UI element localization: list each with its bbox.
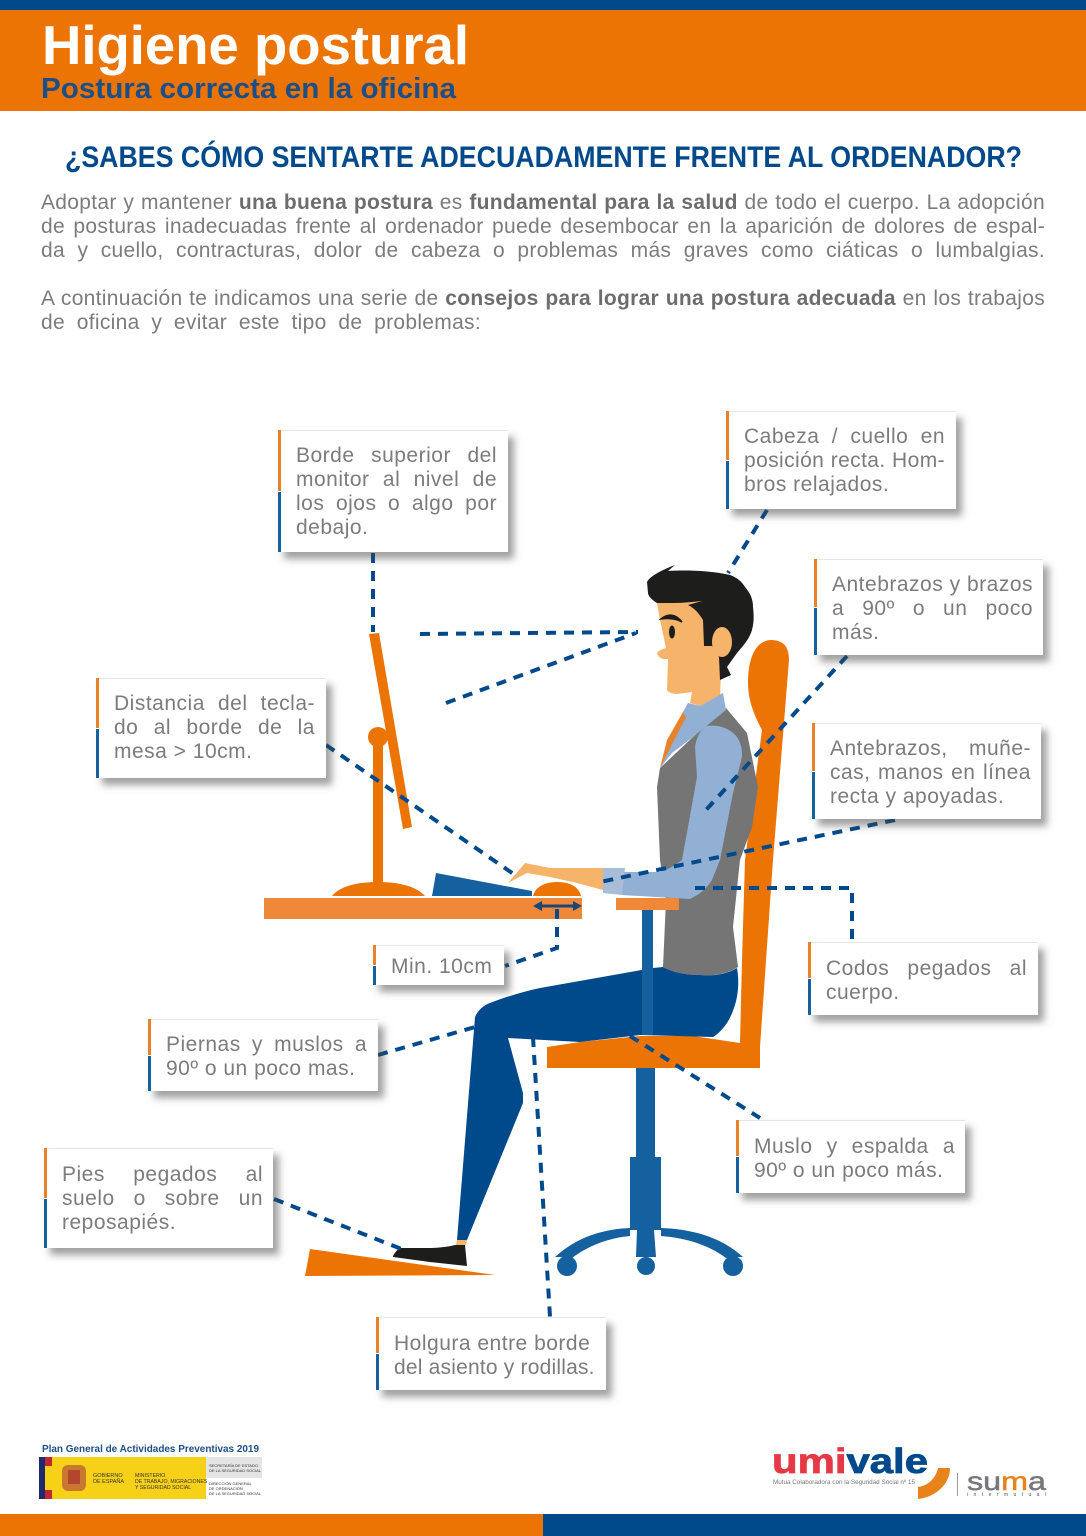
callout: legs and thighs — [148, 1019, 378, 1091]
callout: wrists and hands — [812, 723, 1041, 819]
intro paragraph: da y cuello, contracturas, dolor de cabeza o problemas más graves como ciáticas o lumbalgias. — [41, 239, 1045, 262]
callout: head and neck: Cabeza / cuello en — [744, 425, 945, 448]
illustration: foot rest — [305, 1249, 495, 1276]
callout: feet: suelo o sobre un — [62, 1187, 263, 1210]
illustration: seated man — [393, 565, 758, 1266]
footer band — [0, 1514, 1086, 1536]
callout: monitor: debajo. — [296, 516, 368, 539]
footer: government logo block: DE ORDENACIÓN — [209, 1486, 243, 1491]
callout: thigh and back: 90º o un poco más. — [754, 1159, 943, 1182]
callout: minimum distance — [373, 945, 504, 985]
intro paragraph: de posturas inadecuadas frente al ordenador puede desembocar en la aparición de dolores de espal- — [41, 215, 1045, 238]
intro paragraph: Adoptar y mantener una buena postura es fundamental para la salud de todo el cuerpo. La adopción — [41, 191, 1045, 214]
callout: elbows: cuerpo. — [826, 981, 900, 1004]
second paragraph — [41, 287, 1045, 334]
illustration: chair armrest — [616, 898, 679, 910]
callout: elbows — [808, 942, 1038, 1015]
callout: keyboard distance — [96, 678, 326, 778]
callout: head and neck: bros relajados. — [744, 473, 889, 496]
footer: government logo block: DE TRABAJO, MIGRACIONES — [135, 1479, 208, 1485]
callout: forearms and arms: Antebrazos y brazos — [832, 573, 1033, 596]
callout: wrists and hands: Antebrazos, muñe- — [830, 737, 1031, 760]
callout: monitor: Borde superior del — [296, 444, 497, 467]
callout: forearms and arms: a 90º o un poco — [832, 597, 1033, 620]
footer: umivale and suma logos: su ma — [967, 1466, 1047, 1496]
callout: feet: Pies pegados al — [62, 1163, 263, 1186]
callout: seat clearance: del asiento y rodillas. — [394, 1356, 595, 1379]
callout: monitor — [278, 430, 508, 552]
callout: head and neck — [726, 411, 956, 509]
intro paragraph — [41, 191, 1045, 262]
footer: umivale and suma logos — [772, 1442, 1047, 1499]
footer: government logo block: GOBIERNO — [93, 1473, 123, 1479]
callout: forearms and arms: más. — [832, 621, 880, 644]
callout: thigh and back — [736, 1120, 965, 1193]
dashed leader lines — [274, 510, 895, 1317]
callout: minimum distance: Min. 10cm — [391, 955, 492, 978]
callout: wrists and hands: recta y apoyadas. — [830, 785, 1004, 808]
callout: legs and thighs: 90º o un poco mas. — [166, 1057, 355, 1080]
callout: keyboard distance: Distancia del tecla- — [114, 692, 315, 715]
footer: government logo block: Y SEGURIDAD SOCIAL — [135, 1485, 191, 1491]
footer: umivale and suma logos: Mutua Colaboradora con la Seguridad Social nº 15 — [773, 1479, 916, 1486]
callout: thigh and back: Muslo y espalda a — [754, 1135, 955, 1158]
footer: government logo block: MINISTERIO — [135, 1473, 165, 1479]
footer: government logo block: DE LA SEGURIDAD SOCIAL — [209, 1491, 262, 1496]
callout: monitor: monitor al nivel de — [296, 468, 497, 491]
illustration: desk and monitor — [264, 633, 582, 919]
illustration: office chair — [547, 640, 789, 1276]
footer: government logo block — [39, 1443, 262, 1499]
callout: wrists and hands: cas, manos en línea — [830, 761, 1031, 784]
callout: keyboard distance: do al borde de la — [114, 716, 315, 739]
footer: government logo block: SECRETARÍA DE ESTADO — [209, 1463, 258, 1468]
footer: government logo block: DE ESPAÑA — [93, 1478, 124, 1485]
second paragraph: de oficina y evitar este tipo de problemas: — [41, 311, 481, 334]
callout: seat clearance: Holgura entre borde — [394, 1332, 590, 1355]
callout: keyboard distance: mesa > 10cm. — [114, 740, 252, 763]
footer: government logo block: DIRECCIÓN GENERAL — [209, 1481, 252, 1486]
callout: forearms and arms — [814, 559, 1043, 655]
title: Higiene postural — [42, 14, 469, 76]
callout: elbows: Codos pegados al — [826, 957, 1027, 980]
callout: monitor: los ojos o algo por — [296, 492, 497, 515]
header band — [0, 0, 1086, 111]
footer: umivale and suma logos: umi vale — [772, 1442, 928, 1481]
callout: feet — [44, 1148, 273, 1248]
footer: government logo block: Plan General de Actividades Preventivas 2019 — [42, 1443, 259, 1455]
callout: feet: reposapiés. — [62, 1211, 176, 1234]
callout: legs and thighs: Piernas y muslos a — [166, 1033, 367, 1056]
callout: head and neck: posición recta. Hom- — [744, 449, 945, 472]
callout: seat clearance — [376, 1317, 606, 1390]
footer: umivale and suma logos: intermutual — [967, 1492, 1046, 1498]
second paragraph: A continuación te indicamos una serie de consejos para lograr una postura adecuada en los trabajos — [41, 287, 1045, 310]
subtitle: Postura correcta en la oficina — [41, 73, 457, 105]
footer: government logo block: DE LA SEGURIDAD SOCIAL — [209, 1468, 262, 1473]
